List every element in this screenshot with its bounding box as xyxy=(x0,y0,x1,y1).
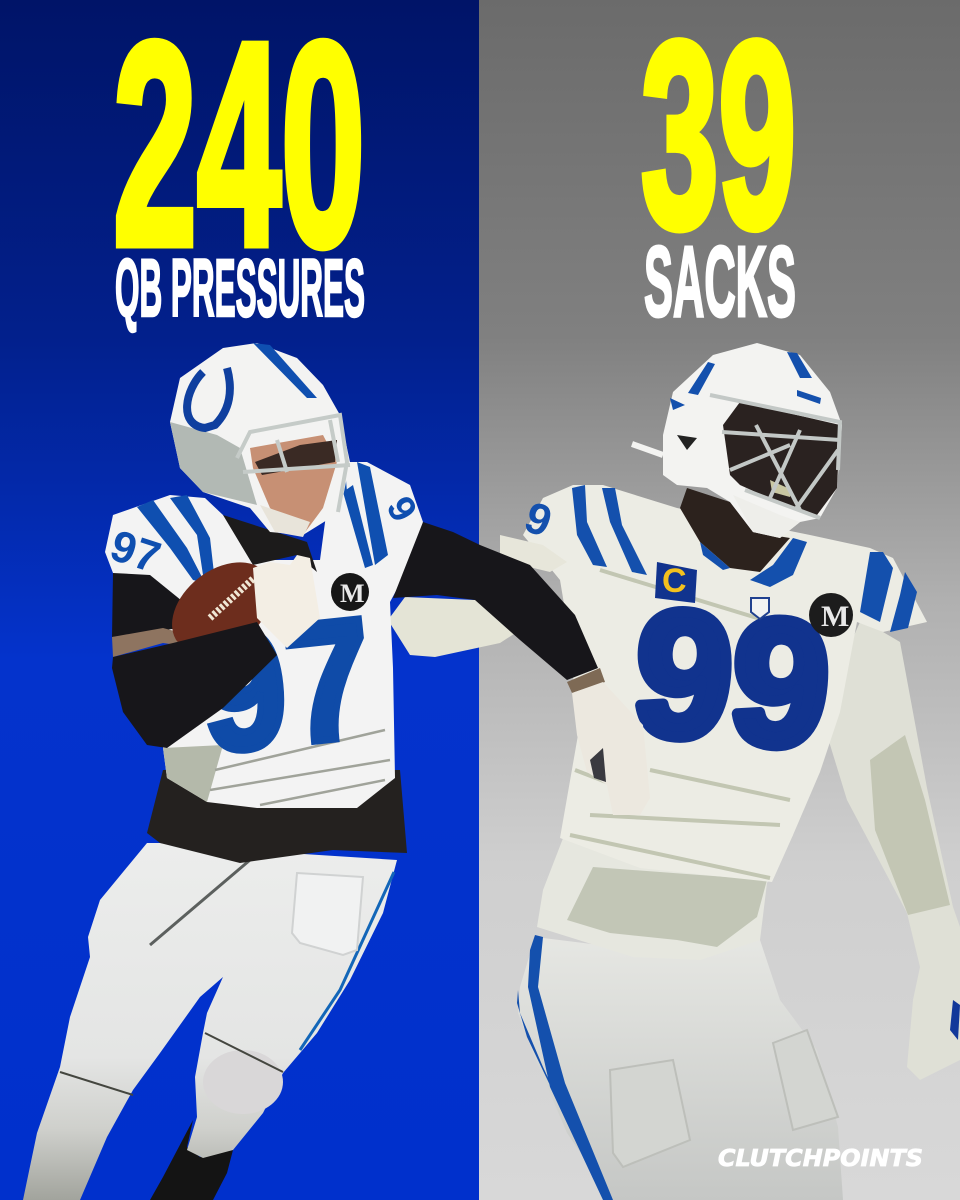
left helmet stripe xyxy=(253,343,317,398)
memorial initial: M xyxy=(821,600,849,633)
right player's glove xyxy=(567,668,650,815)
collar undershirt xyxy=(223,515,317,572)
right player xyxy=(388,343,960,1200)
helmet stripe xyxy=(787,352,812,378)
left player pants xyxy=(23,843,397,1200)
right helmet side bar xyxy=(632,444,663,455)
left facemask xyxy=(237,415,350,512)
right player pants xyxy=(518,937,843,1200)
left player xyxy=(23,343,598,1200)
black forearm xyxy=(112,622,277,748)
left chin strap xyxy=(260,505,310,537)
left player jersey xyxy=(105,462,423,808)
infographic canvas: QB PRESSURES xyxy=(115,243,365,334)
captain letter: C xyxy=(662,562,687,600)
waist seam line xyxy=(150,860,250,945)
black upper arm xyxy=(112,573,187,637)
panel: left blue background xyxy=(0,0,479,1200)
jersey lower hem xyxy=(537,828,793,960)
shoulder stripes xyxy=(572,485,917,632)
right player hand xyxy=(500,535,567,572)
mesh undershirt xyxy=(567,867,767,947)
left helmet horseshoe logo xyxy=(187,368,230,428)
jersey fold shading xyxy=(570,570,790,878)
left helmet gray lower shell xyxy=(170,422,257,505)
brand logo: ClutchPoints: CLUTCHPOINTS xyxy=(718,1146,923,1172)
thigh pad xyxy=(292,873,363,955)
thigh pad xyxy=(610,1060,690,1167)
captain patch xyxy=(655,562,697,603)
left player face xyxy=(250,435,337,535)
knee shading xyxy=(203,1050,283,1114)
jersey fold lines xyxy=(210,730,390,805)
football laces xyxy=(210,578,254,618)
left player shoe xyxy=(150,1120,233,1200)
left sleeve number: 97 xyxy=(104,521,166,583)
right player far arm and hand xyxy=(820,622,960,1080)
helmet word mark xyxy=(797,390,821,404)
glove logo xyxy=(590,748,606,782)
right sleeve number: 9 xyxy=(378,490,425,529)
helmet logo xyxy=(670,362,715,410)
left helmet xyxy=(170,343,350,535)
left player black undershirt xyxy=(147,770,407,863)
jersey shading xyxy=(163,745,223,802)
left jersey number: 97 xyxy=(191,582,382,789)
tattooed arm xyxy=(112,628,178,657)
memorial patch xyxy=(331,573,369,611)
right glove xyxy=(572,682,650,815)
panel: right gray background xyxy=(479,0,960,1200)
left player face shadow xyxy=(255,440,337,475)
memorial patch xyxy=(809,593,853,637)
pant stripe xyxy=(300,872,394,1050)
jersey number 99: 99 xyxy=(627,571,837,786)
right arm shading xyxy=(870,735,950,915)
right facemask xyxy=(710,395,840,518)
second thigh pad xyxy=(773,1030,838,1130)
left shoulder stripes xyxy=(137,462,388,583)
black extended arm xyxy=(393,522,598,680)
knee seam lines xyxy=(60,1033,283,1095)
right player reaching arm xyxy=(388,590,560,657)
right player jersey xyxy=(523,485,927,882)
glove stripe xyxy=(950,1000,960,1040)
NFL shield patch xyxy=(751,598,769,619)
wrist tattoo xyxy=(567,668,605,693)
right player face xyxy=(723,402,840,515)
sleeve number: 9 xyxy=(518,493,558,547)
right chin strap xyxy=(733,495,800,538)
right player mouth xyxy=(770,480,792,497)
football xyxy=(154,544,290,672)
right player neck xyxy=(680,488,790,572)
right player helmet xyxy=(663,343,842,538)
helmet vent xyxy=(677,435,697,450)
left glove xyxy=(253,555,320,648)
pant stripes xyxy=(517,935,613,1200)
collar xyxy=(700,538,807,587)
memorial initial: M xyxy=(340,579,365,608)
